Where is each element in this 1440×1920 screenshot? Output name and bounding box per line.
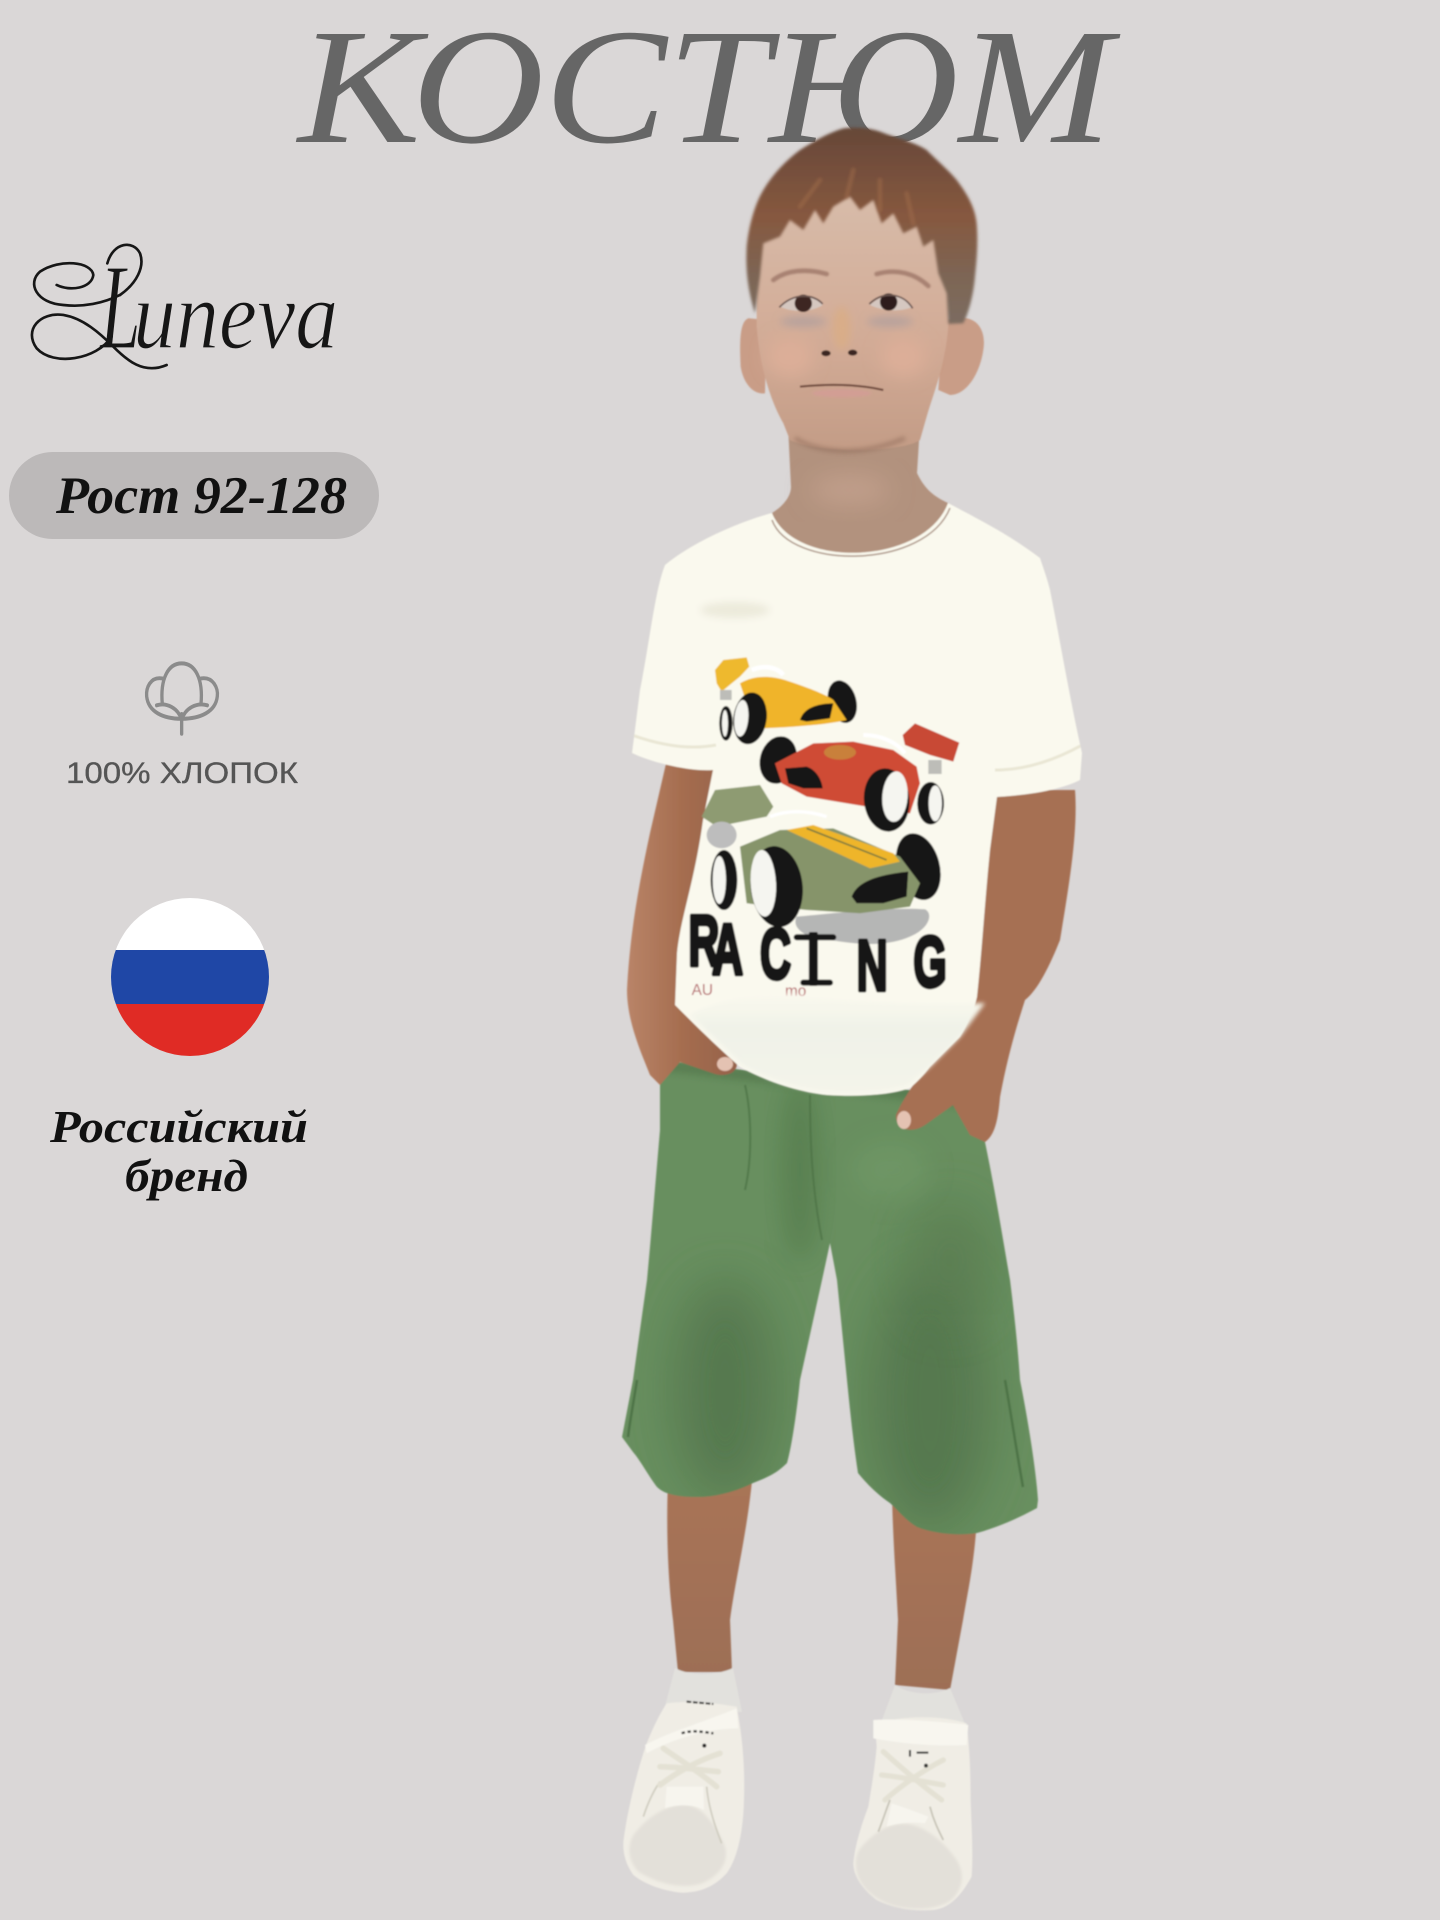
brand logo: L [100,239,141,375]
brand origin text [49,1101,308,1201]
ears [740,318,984,395]
title: КОСТЮМ [296,0,1122,178]
brand origin text: Российский [49,1101,308,1152]
icon: russian flag [111,898,269,1056]
brand origin text: бренд [125,1150,248,1201]
shirt print: racing lettering: RACING [688,901,947,1006]
left arm and hand [627,755,737,1085]
nose [821,350,857,356]
shorts [621,1062,1039,1535]
eyes [779,293,913,312]
olive car [702,785,948,930]
legs [667,1470,977,1690]
icon: cotton boll [147,663,217,734]
t-shirt [632,503,1082,1096]
shirt print: small red lettering [692,982,806,1000]
shirt print: small red lettering: AU [692,982,713,999]
socks [664,1668,966,1726]
chin and neck shading [772,438,950,556]
face shading [767,307,927,397]
boy model [600,128,1082,1910]
left shoe [623,1702,744,1893]
hair [746,128,977,324]
right arm and hand [896,790,1076,1142]
right shoe [853,1717,972,1910]
face [757,179,950,450]
eyebrows [773,271,928,286]
height badge: Рост 92-128 [55,467,347,525]
letter i serifs [797,937,833,983]
height badge [9,452,379,539]
cotton label: 100% ХЛОПОК [66,757,299,790]
brand logo [32,239,338,375]
yellow car [715,657,861,746]
neck [772,425,953,556]
shadow under olive car [795,909,929,944]
shirt print: racing cars [688,657,959,1006]
shirt hem covering print [690,994,985,1093]
hair highlights [800,170,913,223]
shirt print: small red lettering: mo [785,983,806,1000]
mouth [800,385,883,390]
fingernails [717,1057,911,1129]
head [740,128,984,450]
brand logo: uneva [133,263,338,370]
red car [754,723,959,834]
